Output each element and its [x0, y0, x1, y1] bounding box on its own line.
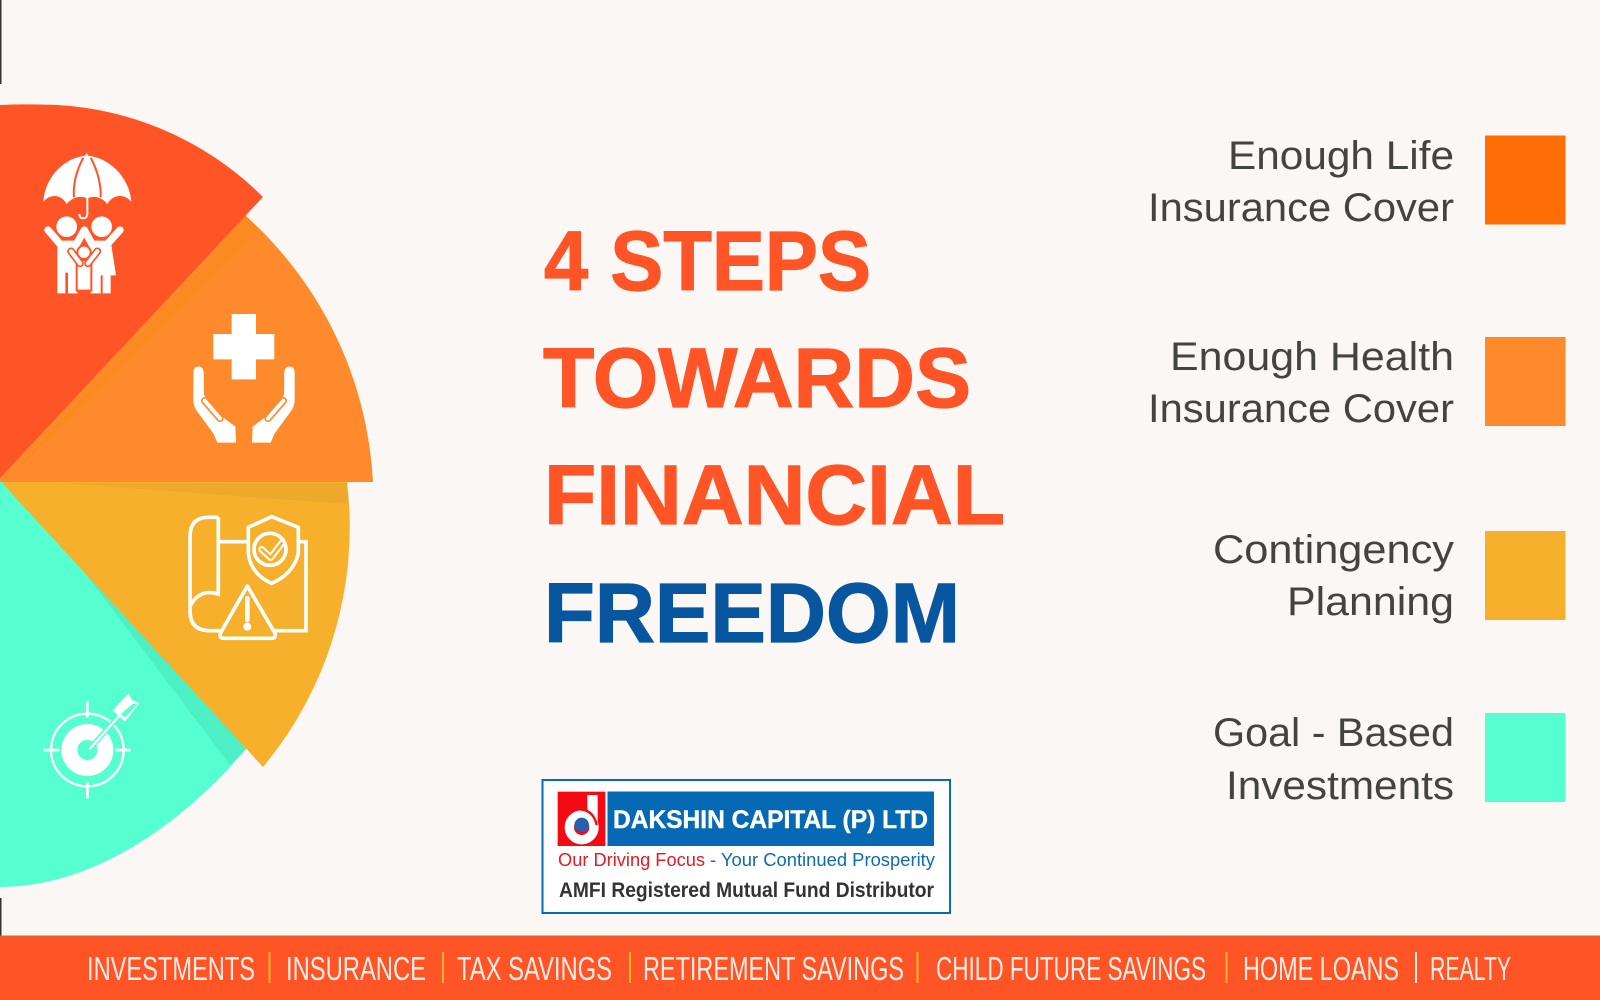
- wedge: health insurance: [0, 205, 373, 482]
- logo mark: [558, 792, 605, 846]
- tagline: Our Driving Focus: [558, 849, 705, 870]
- footer services list: INSURANCE: [286, 950, 426, 987]
- pie chart: four steps: [0, 104, 373, 887]
- tagline: [558, 849, 936, 870]
- title: [543, 214, 1005, 660]
- wedge: contingency planning: [3, 470, 350, 767]
- legend label: Contingency: [1213, 528, 1454, 572]
- legend label: Enough Health: [1170, 335, 1454, 379]
- company name bar: DAKSHIN CAPITAL (P) LTD: [613, 806, 928, 834]
- legend label: Enough Life: [1228, 134, 1454, 178]
- tagline: - Your Continued Prosperity: [710, 849, 936, 870]
- legend label: Goal - Based: [1213, 711, 1454, 755]
- legend label: [1148, 134, 1454, 230]
- footer services list: INVESTMENTS: [87, 950, 255, 987]
- footer services list: REALTY: [1430, 950, 1511, 987]
- icon: cross in caring hands: [193, 314, 295, 443]
- footer services list: CHILD FUTURE SAVINGS: [936, 950, 1206, 987]
- legend swatch: [1485, 531, 1566, 620]
- title line: FINANCIAL: FINANCIAL: [544, 448, 1005, 542]
- footer band: [0, 936, 1600, 1000]
- legend: health insurance: [1148, 335, 1566, 431]
- logo: Dakshin Capital: [542, 780, 950, 913]
- legend swatch: [1485, 713, 1566, 802]
- footer services list: RETIREMENT SAVINGS: [643, 950, 904, 987]
- legend label: Insurance Cover: [1148, 186, 1454, 230]
- AMFI registration line: AMFI Registered Mutual Fund Distributor: [559, 879, 934, 902]
- legend label: [1148, 335, 1454, 431]
- title line: FREEDOM: FREEDOM: [544, 566, 960, 660]
- icon: family under umbrella: [43, 152, 131, 293]
- company name bar: [608, 792, 934, 846]
- footer services list: HOME LOANS: [1243, 950, 1399, 987]
- legend label: Investments: [1226, 764, 1454, 808]
- legend: goal-based investments: [1213, 711, 1566, 808]
- legend label: Planning: [1287, 580, 1454, 624]
- legend label: [1213, 528, 1454, 624]
- legend label: Insurance Cover: [1148, 387, 1454, 431]
- legend swatch: [1485, 337, 1566, 426]
- title line: TOWARDS: TOWARDS: [543, 331, 971, 425]
- icon: scroll plan with shield and warning: [190, 517, 306, 638]
- wedge: goal-based investments: [0, 470, 250, 887]
- footer services list: [87, 950, 1511, 987]
- legend label: [1213, 711, 1454, 808]
- icon: target with arrow: [43, 693, 139, 798]
- legend: contingency planning: [1213, 528, 1566, 624]
- legend swatch: [1485, 136, 1566, 224]
- footer services list: TAX SAVINGS: [457, 950, 612, 987]
- legend: life insurance: [1148, 134, 1566, 230]
- title line: 4 STEPS: 4 STEPS: [544, 214, 871, 308]
- wedge: life insurance: [0, 104, 263, 478]
